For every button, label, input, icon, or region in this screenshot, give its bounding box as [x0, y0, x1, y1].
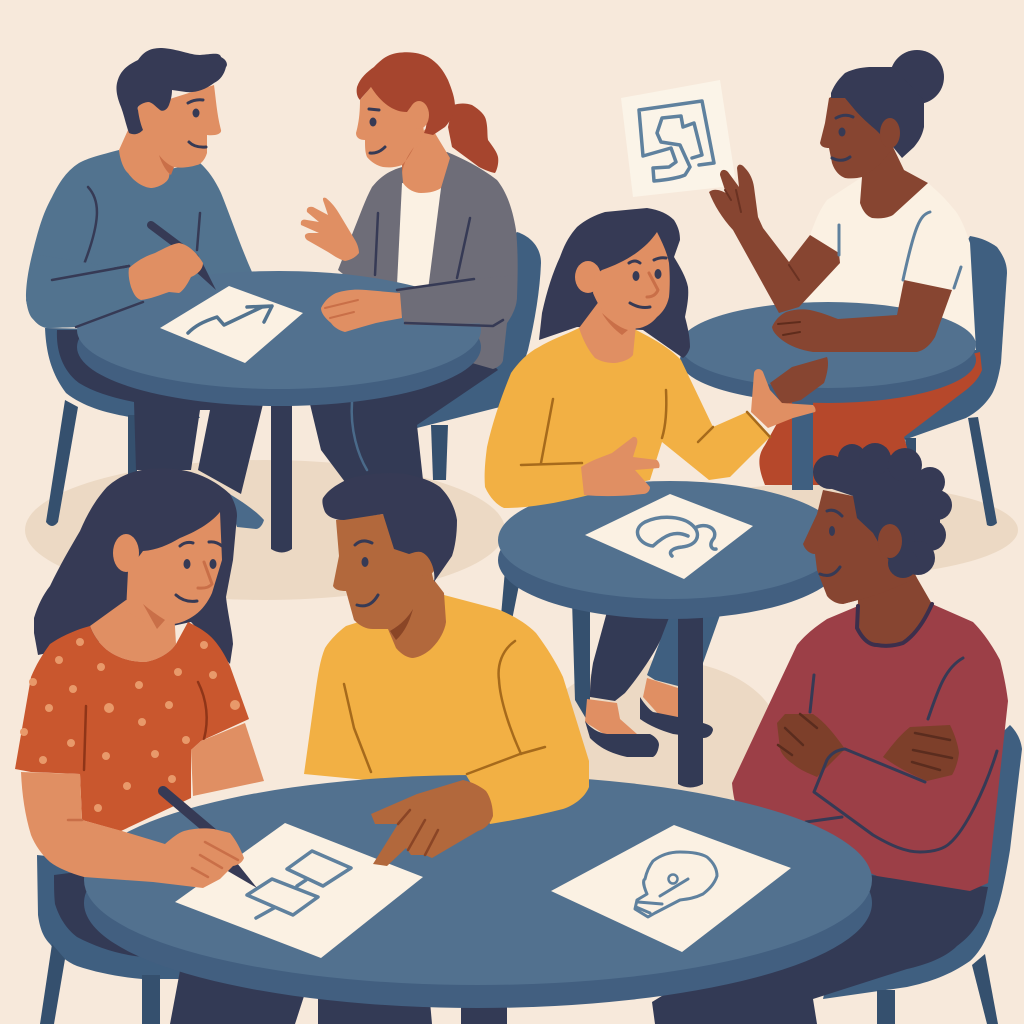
polka dots [20, 638, 240, 812]
paper with light bulb [551, 825, 791, 952]
woman's forearm [21, 772, 175, 882]
person: man in maroon sweater [732, 443, 1008, 891]
neck shadow [143, 604, 165, 629]
paper with brain symbol [585, 494, 753, 579]
facial features [176, 542, 222, 601]
person: man in yellow sweater [304, 473, 589, 790]
forearm and hand on table [772, 280, 952, 352]
ear [113, 534, 139, 572]
neck [843, 560, 932, 647]
person: woman in orange top [15, 468, 264, 831]
face [593, 232, 670, 330]
floor shadows [25, 460, 1018, 816]
top [15, 622, 249, 831]
shoe [585, 721, 659, 757]
hair [322, 473, 457, 582]
head [333, 514, 434, 629]
pedestal [678, 610, 703, 788]
table top [84, 775, 872, 1008]
sleeve lines [397, 279, 503, 326]
arm line [68, 819, 82, 821]
neck shadow [402, 147, 414, 173]
person: woman in white shirt [621, 50, 961, 352]
hand lines [778, 322, 800, 335]
chair legs [501, 570, 590, 722]
sweater creases [521, 390, 770, 465]
dark hand behind [770, 357, 828, 405]
shirt [397, 183, 441, 290]
trouser seam [352, 402, 367, 470]
sleeve crease [467, 747, 545, 774]
woman's drawing hand [153, 828, 244, 888]
facial features [355, 541, 378, 606]
head [130, 85, 221, 168]
face [188, 100, 206, 147]
facial features [820, 510, 842, 575]
neck [119, 130, 172, 188]
face [369, 109, 385, 153]
chair cap [226, 492, 264, 529]
hand on chest [581, 437, 660, 496]
chair: left [37, 855, 185, 1024]
facial features [629, 258, 666, 308]
table top [680, 302, 976, 403]
ear [412, 540, 438, 576]
person: woman in yellow sweater [485, 208, 828, 508]
neck [402, 125, 450, 193]
hair [116, 48, 227, 134]
trousers dark [590, 608, 670, 701]
legs [300, 340, 498, 482]
raised arm and hand [709, 165, 840, 313]
hair [831, 67, 924, 158]
foot [643, 678, 678, 717]
neck [845, 147, 928, 218]
shirt creases [839, 212, 961, 288]
orange trousers [759, 352, 982, 485]
person: man in blue sweater [26, 48, 264, 494]
trousers: maroon man [652, 874, 988, 1024]
ear [409, 101, 429, 129]
neck [579, 300, 636, 363]
pen [151, 225, 216, 290]
hand lines [192, 842, 238, 877]
sleeve: man over table [26, 254, 143, 328]
hand on table [321, 290, 402, 332]
foot [585, 699, 637, 736]
head [356, 87, 424, 167]
face [832, 115, 853, 160]
neck shadow [159, 155, 174, 175]
hand lines [778, 714, 952, 770]
sweater creases [52, 187, 200, 280]
card with maze symbol [621, 80, 735, 197]
paper with flowchart [175, 823, 423, 958]
chair: left man [45, 328, 200, 526]
paper with trend arrow [160, 286, 303, 363]
left hand [777, 714, 845, 777]
neck shadow [602, 313, 628, 335]
hand holding pen [129, 243, 203, 300]
group: middle table [485, 208, 842, 788]
gesturing hand [301, 198, 359, 261]
table top [77, 271, 481, 406]
ear [880, 118, 900, 148]
finger lines [398, 810, 438, 855]
arm crease [725, 190, 799, 280]
curly hair [813, 443, 952, 578]
sweater [485, 328, 770, 508]
open hand [751, 369, 816, 428]
man's sleeve over table [463, 761, 589, 824]
table pedestal [271, 400, 292, 552]
chair [880, 236, 1007, 526]
sweater creases [344, 641, 521, 772]
hair bun [890, 50, 944, 104]
sweater [26, 150, 252, 328]
trousers blue [647, 615, 720, 686]
sweater [732, 604, 1008, 891]
neck shadow [390, 609, 413, 640]
shirt [806, 177, 976, 350]
hair [539, 208, 690, 358]
sweater creases [806, 658, 997, 852]
ear [878, 524, 902, 558]
neck [90, 600, 176, 662]
pen [163, 791, 257, 888]
chair: right [823, 725, 1022, 1024]
sweater [304, 595, 589, 790]
face [126, 512, 222, 625]
legs [57, 330, 264, 494]
person: woman in grey cardigan [300, 52, 518, 482]
legs below table [170, 960, 507, 1024]
chair: right woman [400, 232, 541, 480]
table pedestal [792, 395, 813, 490]
head [820, 90, 893, 178]
group: back-left table [26, 48, 541, 552]
cardigan creases [375, 213, 470, 278]
cardigan sleeve on table [397, 275, 517, 325]
group: front table [15, 443, 1022, 1024]
right hand [883, 725, 959, 781]
hair [357, 52, 455, 135]
finger lines [325, 300, 358, 318]
head [803, 490, 917, 604]
ear [136, 101, 158, 131]
chair inner [54, 871, 144, 957]
table top [498, 481, 842, 619]
neck [388, 580, 446, 658]
shoe [640, 697, 713, 738]
right arm [191, 723, 264, 796]
ear [575, 261, 601, 293]
top creases [84, 682, 207, 770]
man's pointing arm and hand [371, 780, 493, 866]
cardigan [338, 152, 518, 369]
ponytail [448, 104, 498, 173]
hair [34, 468, 237, 664]
collar [857, 604, 932, 646]
sleeve line [52, 266, 143, 327]
